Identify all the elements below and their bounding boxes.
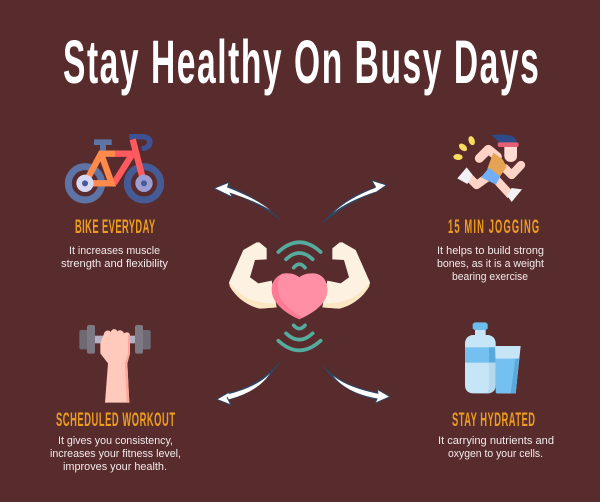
- text: hydrated description: [438, 435, 554, 460]
- icon: water bottle and glass: [465, 322, 521, 393]
- arrow: to hydrated: [323, 367, 390, 403]
- text: hydrated description: oxygen to your cells.: [448, 448, 543, 460]
- icon: hand with dumbbell: [79, 325, 151, 403]
- text: jogging description: It helps to build strong: [437, 245, 544, 257]
- panel: stay hydrated: [438, 322, 554, 460]
- heading: scheduled workout: SCHEDULED WORKOUT: [56, 409, 175, 431]
- heading: 15 min jogging: 15 MIN JOGGING: [448, 216, 539, 238]
- arrow: to jogging: [323, 180, 387, 223]
- text: workout description: improves your health.: [63, 461, 167, 473]
- text: jogging description: bearing exercise: [452, 271, 528, 283]
- panel: 15 min jogging: [437, 135, 544, 283]
- arrow: to bike: [214, 182, 280, 219]
- heading: bike everyday: BIKE EVERYDAY: [75, 216, 155, 238]
- text: bike description: strength and flexibility: [61, 258, 169, 270]
- text: hydrated description: It carrying nutrients and: [438, 435, 554, 447]
- icon: flexing arms with heart: [229, 242, 370, 350]
- text: bike description: It increases muscle: [69, 245, 160, 257]
- arrow: to workout: [217, 363, 279, 405]
- icon: runner: [453, 135, 522, 202]
- panel: scheduled workout: [50, 325, 181, 473]
- text: jogging description: bones, as it is a weight: [437, 258, 544, 270]
- text: jogging description: [437, 245, 544, 283]
- text: bike description: [61, 245, 169, 270]
- heading: stay hydrated: STAY HYDRATED: [452, 409, 535, 431]
- icon: bicycle: [68, 134, 161, 200]
- panel: bike everyday: [61, 134, 169, 270]
- text: workout description: increases your fitness level,: [50, 448, 181, 460]
- text: workout description: It gives you consistency,: [58, 435, 173, 447]
- text: workout description: [50, 435, 181, 473]
- title: Stay Healthy On Busy Days: [63, 28, 539, 97]
